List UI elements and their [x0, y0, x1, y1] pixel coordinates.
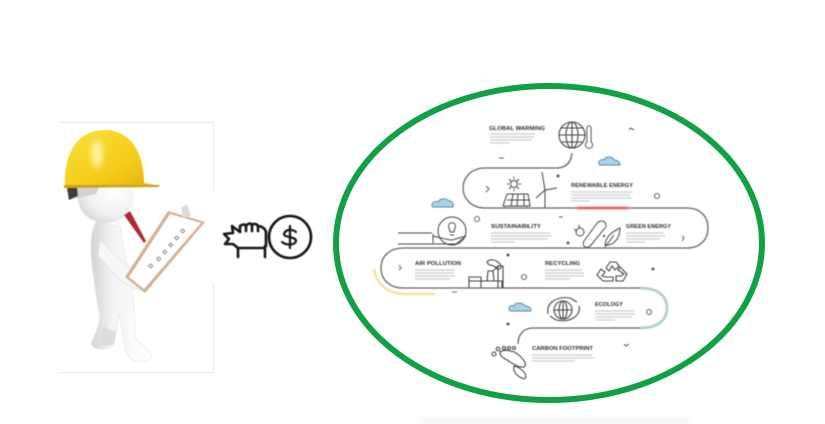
topic: recycling [545, 261, 627, 281]
topic: carbon footprint: CARBON FOOTPRINT [532, 346, 593, 352]
topic: global warming [489, 122, 592, 148]
icon: fist holding money bag [224, 216, 311, 258]
small decorations: arrows, dots and rings [399, 128, 684, 346]
topic: air pollution [415, 260, 503, 288]
topic: carbon footprint [492, 346, 594, 379]
topic: ecology: ECOLOGY [595, 302, 624, 308]
road highlight: yellow [374, 269, 435, 294]
icon: globe and thermometer [559, 122, 592, 148]
topic: air pollution: AIR POLLUTION [415, 261, 461, 267]
icon: solar panels, sun and wind turbine [503, 172, 557, 208]
road highlight: teal [640, 288, 667, 328]
yellow hard hat [64, 130, 160, 188]
green ellipse frame [336, 86, 762, 400]
topic: sustainability: SUSTAINABILITY [491, 224, 542, 230]
worker figure with hard hat and clipboard [64, 130, 205, 362]
topic: renewable energy [503, 172, 634, 208]
winding road line [381, 153, 708, 344]
faint shadow under ellipse [420, 419, 690, 423]
infographic: winding road with topics [374, 122, 708, 379]
worker head [78, 173, 134, 223]
icon: globe with circular arrows [548, 298, 579, 321]
topic: green energy [574, 221, 672, 247]
road highlight: red [577, 207, 628, 209]
red pencil [124, 211, 146, 243]
icon: plug and leaf [574, 221, 620, 247]
worker body [91, 222, 152, 362]
icon: footprint [492, 346, 526, 379]
topic: ecology [548, 298, 635, 321]
icon: recycling arrows [597, 262, 627, 281]
icon: factory with smoke [469, 260, 503, 288]
topic: renewable energy: RENEWABLE ENERGY [571, 183, 634, 189]
topic: green energy: GREEN ENERGY [626, 224, 672, 230]
topic: global warming: GLOBAL WARMING [489, 126, 545, 132]
clouds [432, 157, 620, 311]
icon: hand holding globe with bulb [398, 217, 466, 245]
photo frame: worker image background [58, 122, 214, 372]
safety glasses [67, 186, 100, 200]
clipboard with checklist [125, 204, 205, 293]
topic: recycling: RECYCLING [545, 261, 580, 267]
topic: sustainability [398, 217, 552, 245]
